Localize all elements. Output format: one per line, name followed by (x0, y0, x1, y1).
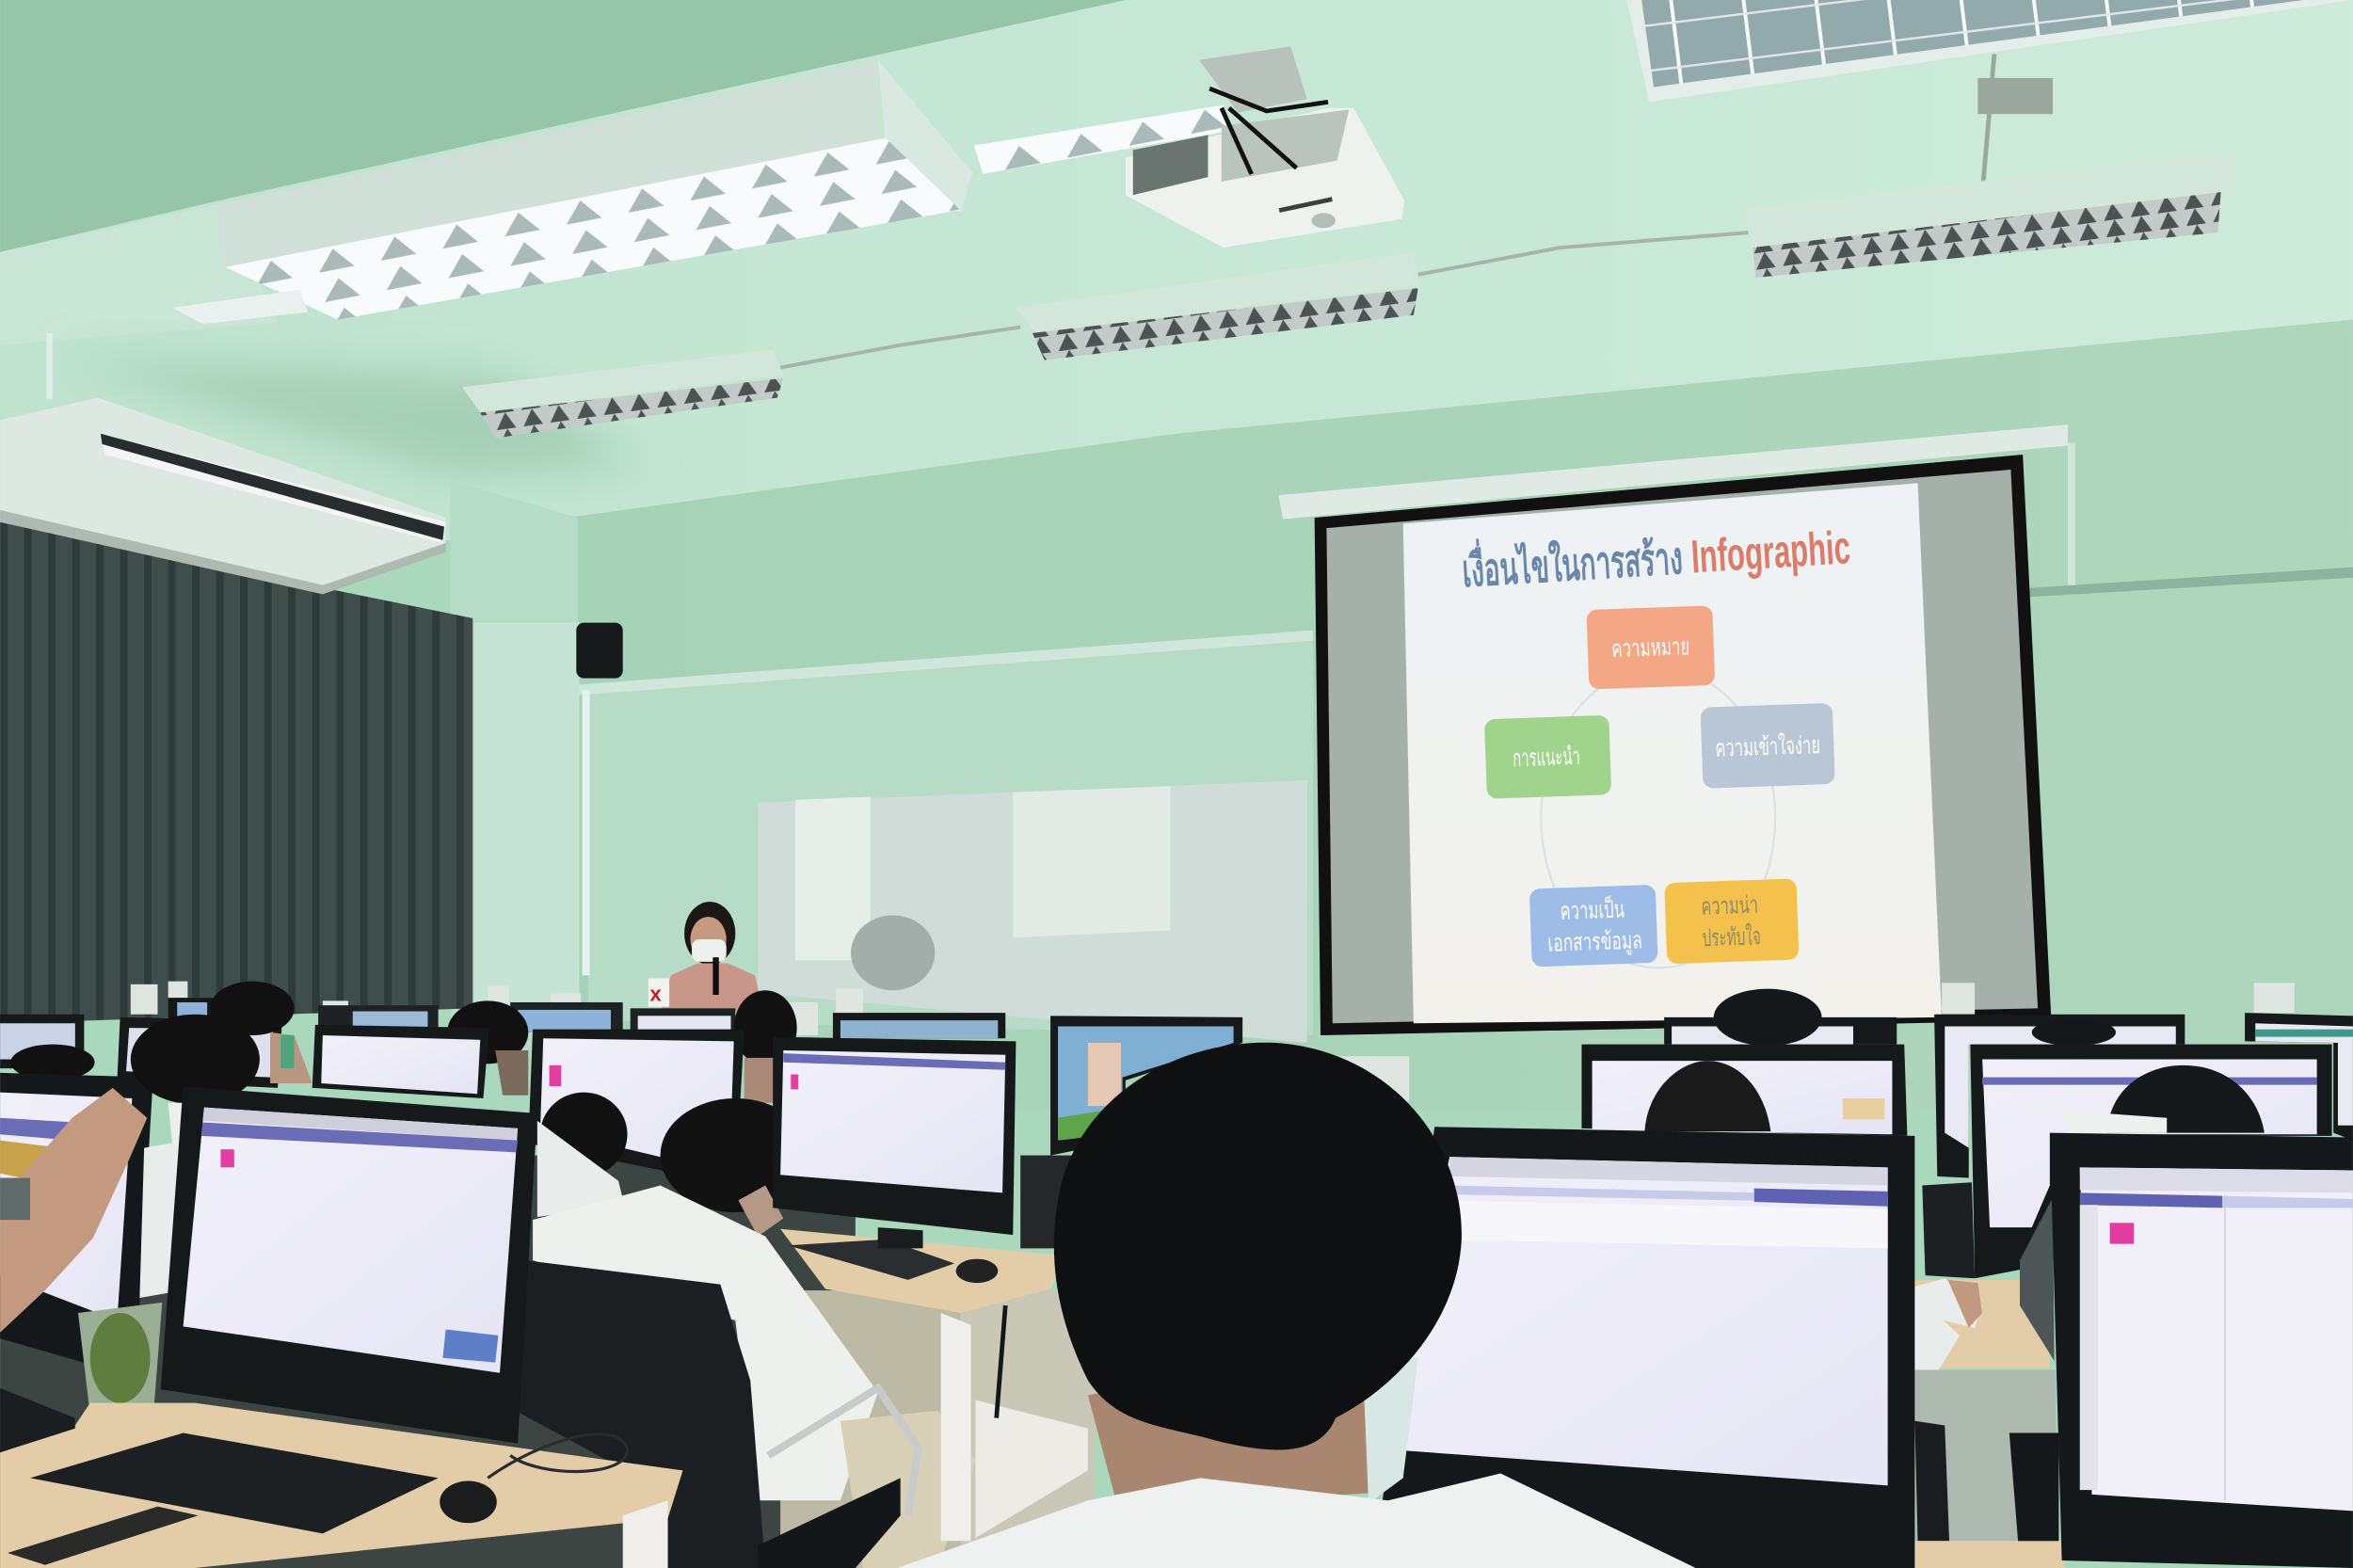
large left monitor (161, 1086, 537, 1467)
right desk (1912, 1182, 2065, 1568)
ceiling light top right (1626, 0, 2353, 102)
foreground student (897, 1043, 1696, 1568)
keyboard (30, 1433, 439, 1533)
slide (1403, 483, 1942, 1023)
monitor left edge (0, 1073, 153, 1378)
student raised arms (0, 1088, 147, 1333)
large center monitor (1373, 1127, 1914, 1568)
desk name cards (131, 982, 2295, 1101)
mouse (440, 1481, 497, 1523)
window blinds (0, 522, 472, 1023)
ceiling (0, 0, 2353, 540)
phone (8, 1507, 199, 1565)
floor and furniture shadows (0, 1156, 2056, 1568)
monitor with desktop wallpaper (1050, 1016, 1242, 1156)
slide title: เงื่อนไขในการสร้าง (1461, 526, 1684, 597)
monitor back far right (1970, 1045, 2332, 1278)
student seated middle (533, 1093, 975, 1568)
center desk (780, 1229, 1088, 1541)
node: impressive: ประทับใจ (1702, 922, 1761, 952)
node: impressive (1664, 878, 1799, 964)
neck (1088, 1336, 1373, 1508)
node: meaning: ความหมาย (1611, 633, 1690, 663)
node: document: ความเป็น (1560, 895, 1625, 925)
face mask (1363, 1358, 1418, 1503)
left desk (0, 1388, 682, 1568)
office chair (518, 1260, 919, 1568)
monitor back right row (1581, 1045, 1907, 1136)
far row monitors (0, 998, 2353, 1177)
ceiling light behind projector (974, 105, 1230, 174)
node: document (1529, 885, 1658, 967)
node: document: เอกสารข้อมูล (1547, 927, 1642, 958)
slide title: Infographic (1689, 521, 1851, 583)
back wall (450, 320, 2353, 1111)
hair (1054, 1043, 1462, 1449)
node: impressive: ความน่า (1701, 892, 1758, 920)
student behind left monitor (131, 1015, 260, 1298)
monitor center row (773, 1037, 1016, 1248)
node: guidance (1484, 715, 1611, 799)
large right monitor (2050, 1133, 2353, 1568)
whiteboard (758, 780, 1307, 1043)
wall speaker (576, 623, 623, 679)
projection screen (1278, 424, 2068, 1035)
far students (10, 982, 2116, 1103)
node: meaning (1586, 605, 1715, 689)
plant cup (78, 1303, 162, 1440)
node: easy to understand (1701, 703, 1835, 789)
ceiling light fixtures (462, 54, 2233, 439)
node: guidance: การแนะนำ (1513, 744, 1580, 772)
monitor row two (312, 1025, 744, 1185)
node: easy to understand: ความเข้าใจง่าย (1715, 731, 1820, 762)
shirt (897, 1474, 1696, 1568)
presenter: x (649, 982, 662, 1005)
projector (1126, 46, 1404, 248)
ceiling light large (172, 60, 972, 324)
air conditioner (0, 333, 446, 594)
presenter (648, 902, 764, 1013)
